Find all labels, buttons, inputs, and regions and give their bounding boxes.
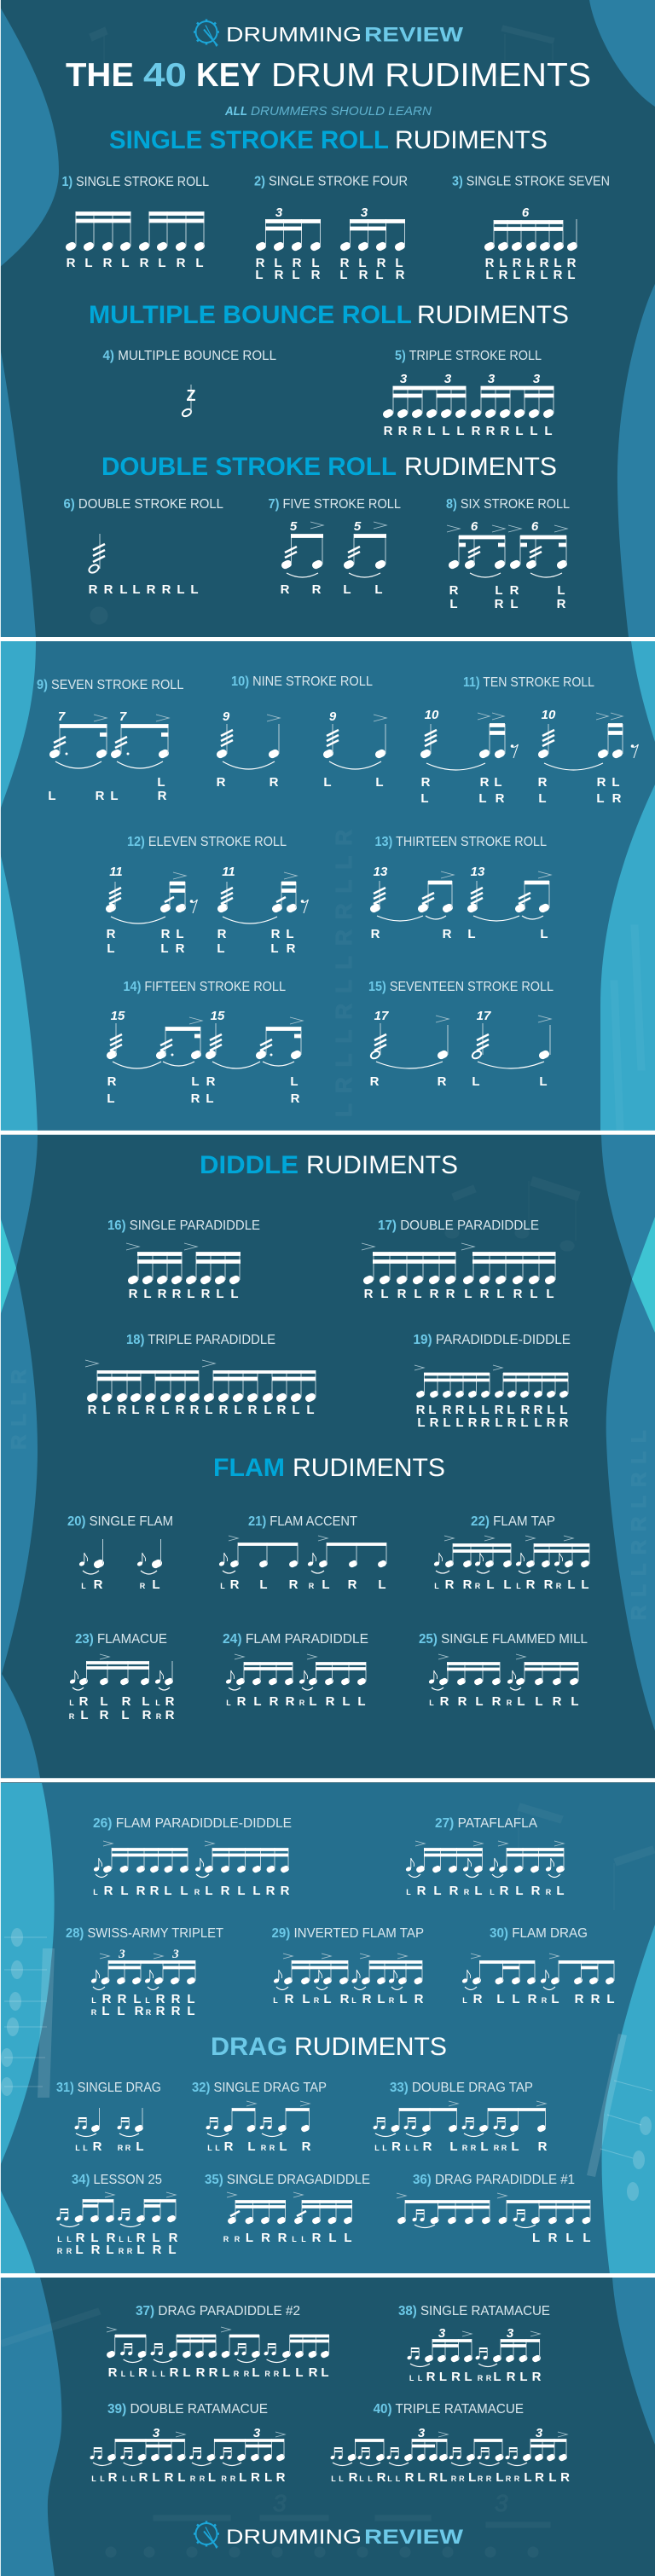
sticking: RLRRLRLL — [129, 1287, 239, 1301]
sticking — [485, 256, 577, 282]
notation — [218, 1536, 386, 1573]
rudiment 9 — [37, 678, 184, 803]
panel: ratamacue rudiments — [0, 2278, 655, 2576]
notation — [407, 2326, 540, 2367]
heading: single stroke roll rudiments: RUDIMENTS — [395, 126, 548, 154]
sticking: RRLL — [281, 582, 383, 597]
notation — [110, 1009, 303, 1068]
sticking: RRLL — [223, 2235, 306, 2243]
rudiment 40 — [330, 2402, 570, 2485]
sticking: LL — [91, 1996, 150, 2005]
panel: flam continued and drag rudiments — [0, 1783, 655, 2274]
sticking: LR — [226, 1699, 305, 1707]
notation: 17 — [374, 1009, 389, 1023]
sticking: LLRLLR — [107, 941, 296, 956]
sticking: LRLRLRL — [485, 268, 576, 282]
rudiment 7 — [268, 497, 401, 597]
heading: flam rudiments — [213, 1454, 445, 1482]
sticking — [69, 1694, 175, 1722]
notation — [206, 2101, 310, 2137]
notation: 15 — [211, 1009, 225, 1023]
logo: bottom — [194, 2521, 463, 2549]
sticking: RLRRLLLRLLRR — [104, 1884, 290, 1898]
panel: diddle and flam rudiments — [0, 1135, 655, 1778]
heading: drag rudiments — [211, 2033, 447, 2061]
rudiment 1 — [61, 175, 209, 270]
sticking — [449, 583, 566, 611]
notation — [78, 1539, 160, 1574]
rudiment 8 — [446, 497, 570, 611]
subtitle: DRUMMERS SHOULD LEARN — [251, 104, 432, 119]
sticking: RL — [94, 1577, 160, 1592]
name: 10) NINE STROKE ROLL — [231, 674, 373, 689]
rudiment 3 — [452, 174, 610, 282]
sticking: LR — [81, 1582, 146, 1590]
sticking: RRRLLLRRRLLL — [384, 424, 553, 438]
notation — [374, 865, 551, 921]
rudiment 37 — [107, 2304, 329, 2380]
notation — [88, 534, 105, 574]
sticking: LRLRR — [80, 1708, 175, 1722]
heading: drag rudiments: DRAG — [211, 2033, 287, 2061]
sticking: LRRRLL — [246, 2231, 352, 2245]
sticking: RLRLR — [79, 1694, 175, 1709]
white dividers — [0, 640, 655, 2275]
panel: single and ten stroke roll rudiments: LRLLRLLRRLLR — [331, 819, 356, 1117]
rudiment 14 — [107, 980, 303, 1106]
sticking: RLLR — [224, 2139, 311, 2154]
name: 16) SINGLE PARADIDDLE — [107, 1219, 260, 1233]
rudiment 34 — [55, 2173, 178, 2257]
heading: flam rudiments: RUDIMENTS — [293, 1454, 445, 1482]
sticking — [48, 775, 167, 803]
notation: Z — [186, 387, 196, 404]
name: 38) SINGLE RATAMACUE — [398, 2304, 550, 2318]
sticking: LLRRRL — [101, 2004, 195, 2018]
notation — [273, 1954, 422, 1990]
notation — [397, 2193, 590, 2227]
sticking — [107, 1074, 300, 1106]
sticking: RRLLRRLL — [89, 582, 199, 597]
notation: 15 — [111, 1009, 125, 1023]
logo: top: REVIEW — [364, 24, 463, 46]
name: 1) SINGLE STROKE ROLL — [61, 175, 209, 189]
sticking: LRLR — [406, 1888, 552, 1896]
sticking: RLRLLRLR — [426, 2370, 542, 2384]
rudiment 11 — [420, 675, 638, 806]
name: 39) DOUBLE RATAMACUE — [107, 2402, 268, 2417]
notation: 33 — [153, 2426, 261, 2440]
heading: double stroke roll rudiments: RUDIMENTS — [404, 453, 557, 481]
notation: 3 — [275, 206, 283, 220]
name: 18) TRIPLE PARADIDDLE — [126, 1333, 275, 1347]
heading: drag rudiments: RUDIMENTS — [294, 2033, 447, 2061]
sticking — [420, 775, 622, 806]
sticking: RRLRRL — [107, 927, 294, 941]
name: 17) DOUBLE PARADIDDLE — [378, 1219, 539, 1233]
panel: diddle and flam rudiments: RLLRRLRLL — [628, 1421, 651, 1620]
rudiment 6 — [63, 497, 223, 597]
sticking — [107, 927, 296, 956]
sticking: RRLLRRLL — [445, 1577, 589, 1592]
sticking: RRRR — [57, 2247, 133, 2255]
notation: 10 — [425, 708, 439, 722]
notation: 13 — [374, 865, 388, 879]
sticking: RLRL — [107, 1074, 299, 1089]
notation — [227, 2192, 352, 2221]
rudiment 5 — [384, 349, 554, 438]
sticking: LR — [462, 1996, 548, 2005]
sticking: RRLL — [217, 775, 384, 790]
panel: ratamacue rudiments: 3 — [273, 2490, 287, 2516]
sticking: RLRLRRLRLRLL — [364, 1287, 554, 1301]
title — [66, 57, 591, 94]
sticking: LR — [220, 1582, 315, 1590]
logo: bottom: REVIEW — [364, 2526, 463, 2549]
rudiment 10 — [217, 674, 386, 790]
sticking: LLRR — [75, 2144, 131, 2152]
notation — [414, 1365, 568, 1395]
notation — [386, 372, 554, 414]
notation — [126, 1243, 241, 1281]
sticking: RL — [93, 2139, 144, 2154]
sticking: RLRLRL — [230, 1577, 386, 1592]
notation: 66 — [471, 519, 539, 534]
notation — [362, 1243, 556, 1281]
sticking: RRRLRRLLLLRL — [108, 2365, 329, 2380]
logo: top — [194, 19, 463, 46]
notation — [225, 1654, 366, 1690]
name: 12) ELEVEN STROKE ROLL — [127, 835, 287, 849]
notation — [220, 709, 386, 769]
notation — [285, 519, 386, 577]
name: 14) FIFTEEN STROKE ROLL — [123, 980, 286, 994]
notation — [461, 1954, 614, 1990]
notation — [181, 385, 196, 418]
notation — [90, 2426, 285, 2466]
subtitle: ALL — [224, 104, 247, 119]
panel: diddle and flam rudiments: RLLR — [8, 1361, 31, 1450]
name: 31) SINGLE DRAG — [56, 2081, 161, 2095]
rudiment 22 — [433, 1514, 589, 1592]
sticking: RRLLLR — [391, 2139, 548, 2154]
name: 36) DRAG PARADIDDLE #1 — [413, 2173, 575, 2187]
rudiment 39 — [90, 2402, 286, 2485]
rudiment 4 — [102, 349, 276, 418]
rudiment 29 — [271, 1926, 424, 2006]
rudiment 20 — [67, 1514, 173, 1592]
notation: 33 — [118, 1948, 179, 1961]
notation — [424, 708, 638, 770]
notation — [330, 2426, 567, 2466]
notation: 10 — [542, 708, 556, 722]
sticking: LLRR — [207, 2144, 275, 2152]
sticking: LRLLRRLRLLRR — [417, 1415, 569, 1430]
name: 8) SIX STROKE ROLL — [446, 497, 570, 512]
heading: multiple bounce roll rudiments: RUDIMENTS — [417, 301, 569, 329]
heading: diddle rudiments — [200, 1151, 458, 1179]
rudiment 13 — [371, 835, 551, 941]
sticking: LLLLRRRR — [121, 2370, 280, 2378]
rudiment 31 — [56, 2081, 161, 2154]
sticking: LR — [429, 1699, 513, 1707]
name: 37) DRAG PARADIDDLE #2 — [136, 2304, 300, 2318]
notation: 55 — [290, 519, 362, 534]
notation: 6 — [522, 206, 530, 220]
rudiment 26 — [93, 1816, 292, 1898]
name: 32) SINGLE DRAG TAP — [192, 2081, 327, 2095]
notation: 33 — [438, 2326, 514, 2341]
sticking: LRLR — [434, 1582, 562, 1590]
sticking: RRLRRL — [421, 775, 620, 790]
sticking: LLLLRRRR — [374, 2144, 507, 2152]
name: 24) FLAM PARADIDDLE — [223, 1632, 368, 1647]
notation: 3 — [361, 206, 368, 220]
name: 35) SINGLE DRAGADIDDLE — [205, 2173, 370, 2187]
heading: double stroke roll rudiments: DOUBLE STROKE ROLL — [101, 453, 397, 481]
notation — [107, 2327, 329, 2362]
name: 22) FLAM TAP — [471, 1514, 555, 1529]
sticking: RLRL — [449, 583, 565, 598]
notation — [428, 1654, 578, 1690]
notation — [447, 519, 567, 577]
notation: 3333 — [400, 372, 541, 386]
name: 20) SINGLE FLAM — [67, 1514, 173, 1529]
rudiment 25 — [419, 1632, 588, 1709]
notation — [405, 1841, 564, 1878]
name: 33) DOUBLE DRAG TAP — [390, 2081, 533, 2095]
sticking — [57, 2231, 178, 2257]
notation — [259, 206, 405, 247]
name: 7) FIVE STROKE ROLL — [268, 497, 401, 512]
heading: multiple bounce roll rudiments: MULTIPLE BOUNCE ROLL — [89, 301, 412, 329]
sticking: RRLRRL — [102, 1992, 195, 2006]
name: 15) SEVENTEEN STROKE ROLL — [368, 980, 554, 994]
heading: multiple bounce roll rudiments — [89, 301, 569, 329]
sticking — [91, 1992, 195, 2018]
rudiment 12 — [107, 835, 309, 956]
rudiment 24 — [223, 1632, 368, 1709]
name: 11) TEN STROKE ROLL — [463, 675, 594, 690]
name: 13) THIRTEEN STROKE ROLL — [375, 835, 547, 849]
sticking: RLRLRLRL — [256, 256, 403, 270]
heading: diddle rudiments: RUDIMENTS — [306, 1151, 458, 1179]
heading: double stroke roll rudiments — [101, 453, 557, 481]
sticking: RLLRLRRL — [473, 1992, 615, 2006]
name: 23) FLAMACUE — [75, 1632, 167, 1647]
rudiment 28 — [66, 1926, 224, 2018]
sticking: RLRRLLRLRRLL — [416, 1403, 568, 1417]
sticking: RLRLRLRRLRLRLRLL — [88, 1403, 315, 1417]
name: 9) SEVEN STROKE ROLL — [37, 678, 184, 692]
sticking: LRLR — [273, 1996, 395, 2005]
heading: diddle rudiments: DIDDLE — [200, 1151, 299, 1179]
name: 4) MULTIPLE BOUNCE ROLL — [102, 349, 276, 363]
sticking: LRLR — [107, 1091, 300, 1106]
sticking: LRLL — [532, 2231, 591, 2245]
rudiment 21 — [218, 1514, 386, 1592]
sticking: RRLL — [371, 927, 548, 941]
sticking: LL — [69, 1699, 160, 1707]
sticking: LRLLRL — [75, 2243, 177, 2257]
sticking: RLLRRLLR — [285, 1992, 424, 2006]
notation — [109, 865, 309, 923]
sticking: LRLRLRLR — [255, 268, 405, 282]
sticking: LLRLLR — [420, 791, 622, 806]
title: 40 — [143, 57, 187, 94]
name: 6) DOUBLE STROKE ROLL — [63, 497, 223, 512]
sticking: LLLLLLRRRRRR — [331, 2475, 520, 2483]
sticking: RRLRLLRL — [440, 1694, 579, 1709]
heading: single stroke roll rudiments: SINGLE STROKE ROLL — [109, 126, 389, 154]
notation — [90, 1948, 195, 1990]
rudiment 36 — [397, 2173, 591, 2245]
sticking: LLLLRRRR — [91, 2475, 236, 2483]
title: THE — [66, 57, 134, 94]
sticking: RR — [69, 1712, 162, 1721]
title: KEY — [196, 57, 261, 94]
notation — [93, 1841, 288, 1878]
notation — [69, 211, 205, 247]
notation — [369, 1009, 551, 1068]
sticking: RLRLRLR — [485, 256, 577, 270]
rudiment 17 — [362, 1219, 556, 1301]
logo: top: DRUMMING — [226, 24, 362, 46]
notation — [85, 1360, 316, 1398]
notation — [433, 1536, 589, 1573]
notation: 11 — [109, 865, 123, 879]
notation: 17 — [477, 1009, 491, 1023]
notation: 77 — [58, 709, 127, 724]
title: DRUM RUDIMENTS — [271, 57, 591, 94]
notation: 33 — [418, 2426, 543, 2440]
notation — [55, 2192, 176, 2227]
logo: bottom: DRUMMING — [226, 2526, 362, 2549]
panel: ratamacue rudiments: 3 — [495, 2490, 508, 2516]
sticking: RRRLRLLLLRLR — [349, 2470, 570, 2485]
name: 30) FLAM DRAG — [490, 1926, 588, 1941]
notation: 13 — [471, 865, 485, 879]
sticking: RR — [91, 2008, 152, 2017]
sticking: LR — [93, 1888, 200, 1896]
name: 28) SWISS-ARMY TRIPLET — [66, 1926, 224, 1941]
sticking: RLRLRLRL — [67, 256, 204, 270]
notation — [488, 206, 577, 247]
rudiment 30 — [461, 1926, 615, 2006]
notation — [69, 1654, 172, 1690]
name: 29) INVERTED FLAM TAP — [271, 1926, 424, 1941]
notation — [373, 2101, 546, 2137]
rudiment 27 — [405, 1816, 565, 1898]
sticking: LRLR — [48, 789, 167, 803]
rudiment 38 — [398, 2304, 550, 2384]
rudiment 19 — [413, 1333, 571, 1430]
panel: intro and roll rudiments — [0, 0, 655, 637]
sticking: RRLRLLLRLR — [108, 2470, 286, 2485]
notation — [74, 2108, 142, 2137]
panel: single and ten stroke roll rudiments — [0, 641, 655, 1151]
notation: 99 — [223, 709, 337, 724]
sticking: LLLL — [57, 2235, 132, 2243]
notation — [53, 709, 169, 768]
rudiment 18 — [85, 1333, 316, 1417]
rudiment 33 — [373, 2081, 548, 2154]
heading: flam rudiments: FLAM — [213, 1454, 285, 1482]
sticking: LRLR — [449, 597, 566, 611]
sticking: LLRR — [409, 2374, 492, 2382]
name: 34) LESSON 25 — [72, 2173, 162, 2187]
sticking: RLRRLRLL — [237, 1694, 366, 1709]
name: 5) TRIPLE STROKE ROLL — [395, 349, 542, 363]
rudiment 35 — [205, 2173, 370, 2245]
name: 21) FLAM ACCENT — [248, 1514, 357, 1529]
sticking — [416, 1403, 569, 1430]
name: 2) SINGLE STROKE FOUR — [254, 174, 408, 189]
name: 27) PATAFLAFLA — [435, 1816, 538, 1831]
name: 40) TRIPLE RATAMACUE — [374, 2402, 524, 2417]
sticking — [255, 256, 405, 282]
name: 19) PARADIDDLE-DIDDLE — [413, 1333, 571, 1347]
rudiment 16 — [107, 1219, 260, 1301]
sticking: RLRRLR — [76, 2231, 178, 2245]
name: 25) SINGLE FLAMMED MILL — [419, 1632, 588, 1647]
sticking: L — [157, 775, 165, 790]
notation: 11 — [222, 865, 235, 879]
heading: single stroke roll rudiments — [109, 126, 548, 154]
rudiment 23 — [69, 1632, 175, 1722]
name: 3) SINGLE STROKE SEVEN — [452, 174, 610, 189]
sticking: RRLL — [370, 1074, 548, 1089]
rudiment 32 — [192, 2081, 327, 2154]
rudiment 15 — [368, 980, 554, 1089]
name: 26) FLAM PARADIDDLE-DIDDLE — [93, 1816, 292, 1831]
rudiment 2 — [254, 174, 408, 282]
sticking: RLRLRLRL — [417, 1884, 565, 1898]
